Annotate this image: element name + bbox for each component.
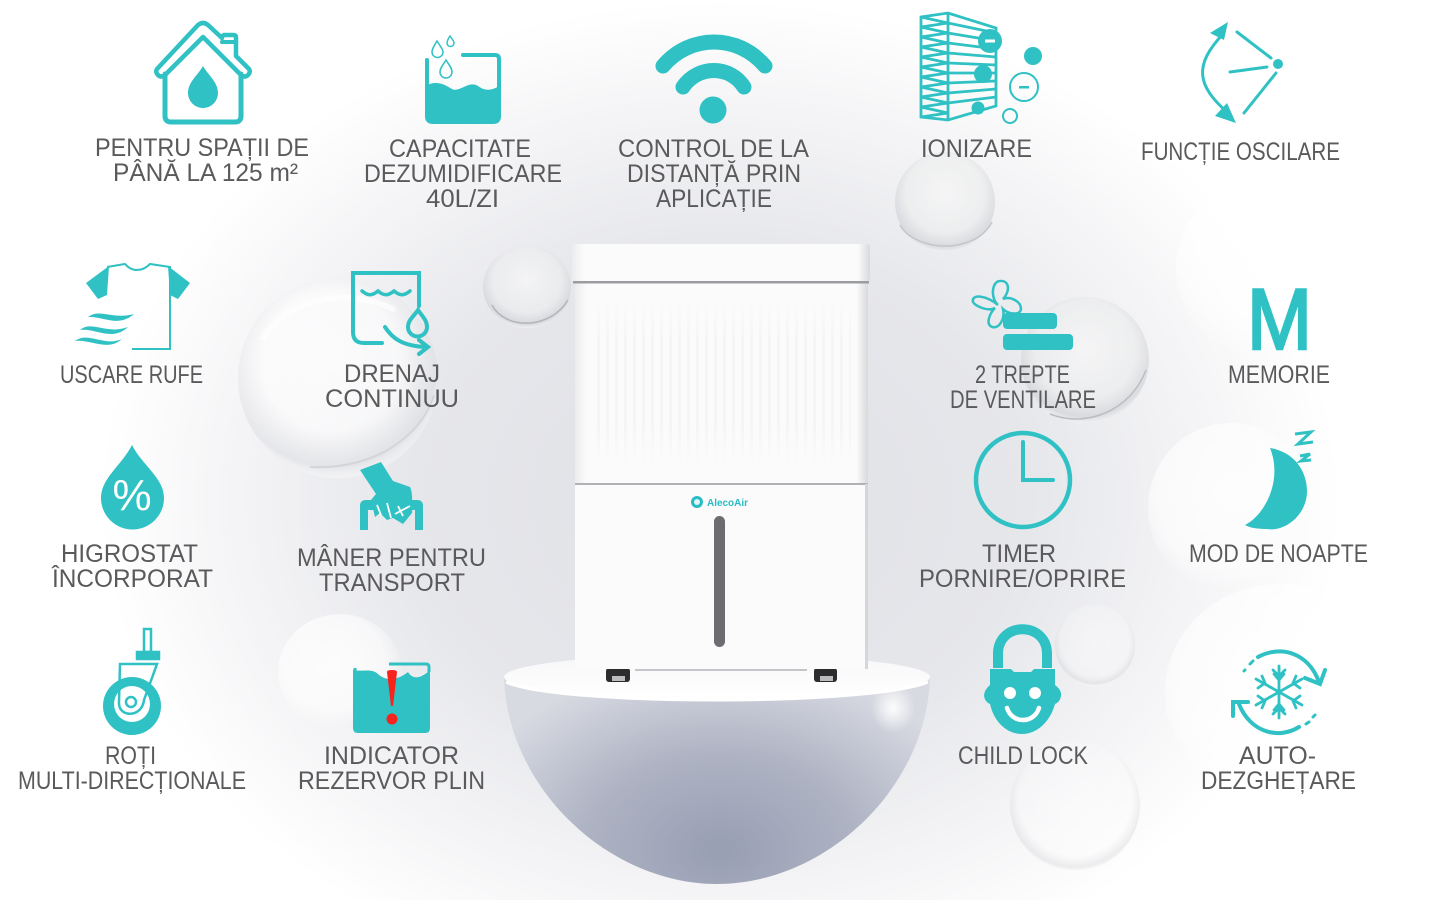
label (325, 360, 459, 413)
icon: ion filter (921, 13, 1042, 123)
icon: letter M: M (1247, 272, 1312, 368)
label: TIMER (982, 540, 1056, 568)
feature: night mode (1189, 432, 1368, 568)
label (297, 543, 486, 597)
label (919, 540, 1126, 593)
label: CONTROL DE LA (618, 135, 809, 163)
feature: continuous drain (325, 273, 459, 413)
label: ÎNCORPORAT (51, 564, 213, 593)
feature: 2 fan speeds (950, 281, 1096, 414)
label (618, 135, 809, 213)
label: IONIZARE (921, 135, 1032, 163)
label: MULTI-DIRECȚIONALE (18, 767, 246, 795)
label: INDICATOR (324, 742, 459, 770)
feature: full tank indicator (298, 664, 485, 795)
feature: hygrostat (51, 445, 213, 593)
icon: hand on handle (360, 462, 423, 530)
label (95, 134, 309, 187)
icon: wifi (663, 42, 765, 124)
label: DRENAJ (344, 360, 440, 388)
icon: tank with red exclamation (353, 664, 430, 733)
label: 2 TREPTE (975, 361, 1070, 389)
icon: drop with percent: % (112, 471, 152, 520)
icon: snowflake with cycle arrows (1233, 651, 1325, 733)
feature: carry handle (297, 462, 486, 597)
label: FUNCȚIE OSCILARE (1141, 138, 1340, 166)
label: APLICAȚIE (656, 185, 772, 213)
level window (714, 516, 725, 647)
feature: auto defrost (1201, 651, 1356, 795)
icon: drop with percent (101, 445, 164, 530)
label: DISTANȚĂ PRIN (627, 159, 801, 188)
icon: t-shirt (75, 264, 190, 349)
icon: house with drop (156, 23, 250, 122)
label: DEZUMIDIFICARE (364, 160, 562, 188)
feature: child lock (958, 629, 1088, 770)
feature: memory (1228, 272, 1330, 389)
label: USCARE RUFE (60, 361, 203, 389)
label: AUTO- (1239, 742, 1316, 770)
label: DEZGHEȚARE (1201, 767, 1356, 795)
icon: caster wheel (103, 629, 161, 735)
label (298, 742, 485, 795)
label: MOD DE NOAPTE (1189, 540, 1368, 568)
label: PÂNĂ LA 125 m² (113, 158, 298, 187)
pedestal bowl (504, 654, 930, 884)
label: ROȚI (105, 742, 156, 770)
feature: oscillation (1141, 22, 1340, 166)
icon: fan with bars (973, 281, 1073, 350)
icon: water tank with drops (425, 36, 501, 124)
label (51, 540, 213, 593)
label: CONTINUU (325, 385, 459, 413)
label (18, 742, 246, 795)
label: CHILD LOCK (958, 742, 1088, 770)
label: MEMORIE (1228, 361, 1330, 389)
label (364, 135, 562, 213)
label: TRANSPORT (319, 569, 465, 597)
icon: drain (353, 273, 428, 354)
logo: AlecoAir (707, 498, 748, 509)
icon: oscillation arrows (1203, 22, 1283, 123)
body (575, 280, 868, 669)
air grille (597, 300, 851, 465)
feature: laundry drying (60, 264, 203, 389)
logo (691, 496, 748, 509)
top cap (572, 244, 870, 282)
water bubbles (238, 152, 1395, 871)
feature: room size (95, 23, 309, 187)
icon: moon and zz (1245, 432, 1313, 529)
label: 40L/ZI (426, 185, 499, 213)
feature: ionizer (921, 13, 1042, 163)
label: PENTRU SPAȚII DE (95, 134, 309, 162)
feature: multi-directional wheels (18, 629, 246, 795)
wheels (606, 668, 837, 682)
icon: padlock face (984, 629, 1061, 734)
label (1201, 742, 1356, 795)
dehumidifier (572, 244, 870, 682)
feature: timer (919, 433, 1126, 593)
label (950, 361, 1096, 414)
water tank (575, 484, 868, 669)
feature: capacity (364, 36, 562, 213)
label: CAPACITATE (389, 135, 531, 163)
label: REZERVOR PLIN (298, 767, 485, 795)
label: DE VENTILARE (950, 386, 1096, 414)
label: HIGROSTAT (61, 540, 198, 568)
feature: remote control (618, 42, 809, 213)
icon: clock (976, 433, 1070, 527)
label: MÂNER PENTRU (297, 543, 486, 572)
label: PORNIRE/OPRIRE (919, 565, 1126, 593)
